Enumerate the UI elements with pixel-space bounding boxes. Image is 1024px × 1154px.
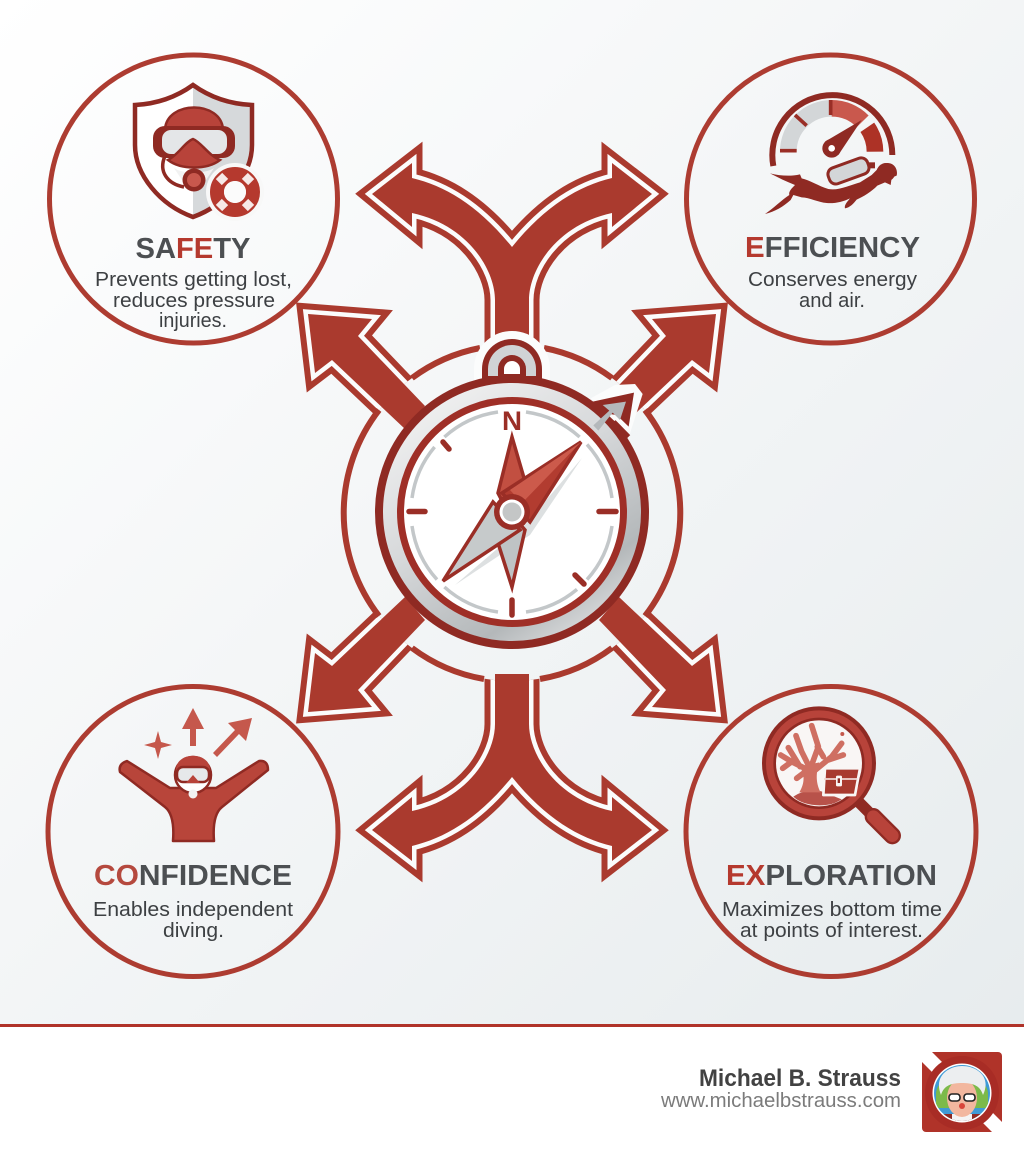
text: exploration description: Maximizes bottom time [722,899,942,921]
panel: safety [50,55,338,343]
heading: exploration: EXPLORATION [726,860,937,892]
compass case [379,379,645,645]
text: confidence description: Enables independent [93,899,293,921]
text: confidence description [93,899,293,942]
arrows and ring around compass [308,163,716,861]
footer [0,1024,1024,1132]
compass needles [443,437,581,587]
compass hub [494,494,530,530]
author name: Michael B. Strauss [699,1065,901,1092]
icon: magnifying glass with coral and chest [764,708,892,836]
compass [379,339,645,645]
north label: N [502,406,522,436]
icon: gauge and diver [765,95,897,214]
cardinal ticks [409,442,616,615]
compass lug [482,339,542,380]
text: confidence description: diving. [163,920,224,942]
panel: efficiency [686,55,974,343]
text: exploration description [722,899,942,942]
needle shadow [455,458,582,585]
text: safety description: Prevents getting lost, [95,269,292,291]
heading: safety: SAFETY [136,233,250,265]
website: www.michaelbstrauss.com [660,1090,901,1112]
text: efficiency description: Conserves energy [748,269,917,291]
icon: shield with diver and lifebuoy [135,80,264,221]
bearing arrow on rim [591,384,643,437]
text: exploration description: at points of interest. [740,920,923,942]
panel: confidence [48,686,338,976]
dial tick ring [412,412,612,612]
text: efficiency description: and air. [799,290,865,312]
heading: confidence: CONFIDENCE [94,860,292,892]
text: safety description: injuries. [159,310,227,332]
text: efficiency description [748,269,917,312]
icon: diver with arms raised [120,708,268,841]
heading: efficiency: EFFICIENCY [745,232,920,264]
panel: exploration [686,686,976,976]
text: safety description [95,269,292,332]
text: safety description: reduces pressure [113,290,275,312]
logo [922,1052,1002,1132]
